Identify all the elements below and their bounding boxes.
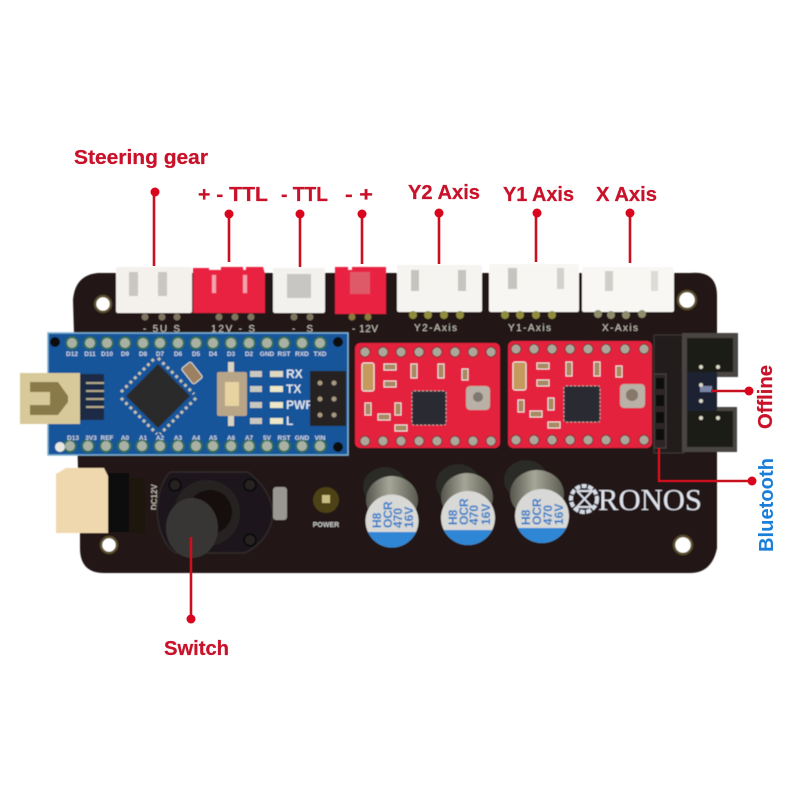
connector: Y1 axis: Y1-Axis [508,323,551,334]
nano pin labels: RXD [295,351,309,358]
callout: steering gear [74,147,208,266]
CRONOS logo: RONOS [598,482,702,517]
callout: offline [711,365,777,429]
callout: - +: - + [345,184,373,206]
callout: + - TTL [198,184,268,262]
status LEDs: TX [286,382,301,396]
bluetooth socket [654,374,666,448]
power LED: POWER [313,522,339,529]
connector: X axis [582,267,674,334]
connector: red + - TTL: 12V - S [211,324,255,335]
nano pin labels: A6 [227,435,236,442]
callout: bluetooth: Bluetooth [756,458,778,552]
connector: Y2 axis: Y2-Axis [414,323,457,334]
callout: X axis: X Axis [596,184,657,206]
controller board photo [20,264,738,573]
nano pin labels: D11 [84,351,96,358]
callout: - TTL [281,184,328,267]
mini USB port [20,373,104,424]
capacitor 1: 470 [391,508,405,528]
connector: Y1 axis [489,264,579,334]
capacitor 2 [436,464,496,550]
capacitor 1: 16V [402,507,416,528]
capacitor 3 [504,460,570,548]
callout: X axis [596,184,657,263]
capacitor 2: OCR [457,498,471,525]
connector: red - +: - 12V [352,324,378,335]
capacitor 1: H8 [370,512,384,528]
nano pin labels: D9 [121,351,130,358]
A4988 driver: Y2 [355,343,500,448]
nano pin labels: A5 [209,435,218,442]
nano pin labels: VIN [315,435,326,442]
callout: switch: Switch [164,638,229,660]
nano pin labels: A3 [174,435,183,442]
microcontroller chip [121,358,196,434]
callout: steering gear: Steering gear [74,147,208,169]
nano pin labels: A4 [192,435,201,442]
callout: + - TTL: + - TTL [198,184,268,206]
nano pin labels: GND [295,435,310,442]
black circuit board [73,273,717,573]
capacitor 2: 16V [479,504,493,525]
callout: Y2 axis: Y2 Axis [408,182,480,204]
nano corner holes [50,337,343,452]
capacitor 2: 470 [467,505,481,525]
nano pin labels: D13 [67,435,79,442]
capacitor 2: H8 [446,509,460,525]
callout: Y2 axis [408,182,480,264]
crystal [181,361,203,385]
callout: offline: Offline [755,365,777,429]
nano pin labels: RST [278,351,291,358]
callout: Y1 axis: Y1 Axis [503,184,574,206]
nano pin labels: TXD [314,351,327,358]
callout: Y1 axis [503,184,574,262]
nano pin labels: A2 [156,435,165,442]
capacitor 3: H8 [519,509,533,525]
nano pin labels: REF [100,435,114,442]
connector: red - + [335,267,386,335]
callout: - + [345,184,373,264]
status LEDs: PWR [286,398,314,412]
nano pin labels: D8 [139,351,148,358]
capacitor 3: 16V [552,504,566,525]
nano pin labels [66,351,327,442]
status LEDs [250,367,314,428]
power LED [313,487,339,529]
nano pin labels: D2 [245,351,254,358]
connector: X axis: X-Axis [602,323,638,334]
nano pin labels: D7 [156,351,165,358]
nano pin labels: D4 [209,351,218,358]
status LEDs: L [286,414,293,428]
connector: steering gear [116,267,192,335]
A4988 driver: Y1 [508,341,652,448]
status LEDs: RX [286,367,303,381]
nano pin labels: A1 [139,435,148,442]
nano pin labels: D5 [192,351,201,358]
callout: switch [164,537,229,660]
joystick switch [157,472,287,558]
capacitor 3: 470 [541,505,555,525]
power jack [56,468,159,533]
nano pin labels: A7 [245,435,254,442]
connector: red + - TTL [193,267,265,335]
nano pin labels: A0 [121,435,130,442]
callout: bluetooth [659,448,778,552]
capacitor 3: OCR [530,498,544,525]
nano pin labels: D12 [66,351,78,358]
power jack: DC12V [150,484,159,510]
connector: white - TTL [273,268,325,335]
connector: Y2 axis [397,265,482,334]
nano pin labels: 5V [263,435,272,442]
nano pin labels: D10 [101,351,113,358]
offline box header [654,333,738,453]
Arduino Nano module [20,333,348,455]
nano pin labels: 3V3 [85,435,97,442]
reset button [217,362,247,426]
capacitor 1: OCR [381,501,395,528]
capacitor 1 [363,467,420,552]
nano pin labels: RST [278,435,291,442]
mounting holes [95,291,696,554]
nano pin labels: D6 [174,351,183,358]
connector: steering gear: - 5U S [143,324,180,335]
nano pins [64,337,326,452]
connector: white - TTL: - S [292,324,313,335]
nano pin labels: D3 [227,351,236,358]
nano pin labels: GND [260,351,275,358]
ICSP header [310,371,346,426]
callout: - TTL: - TTL [281,184,328,206]
